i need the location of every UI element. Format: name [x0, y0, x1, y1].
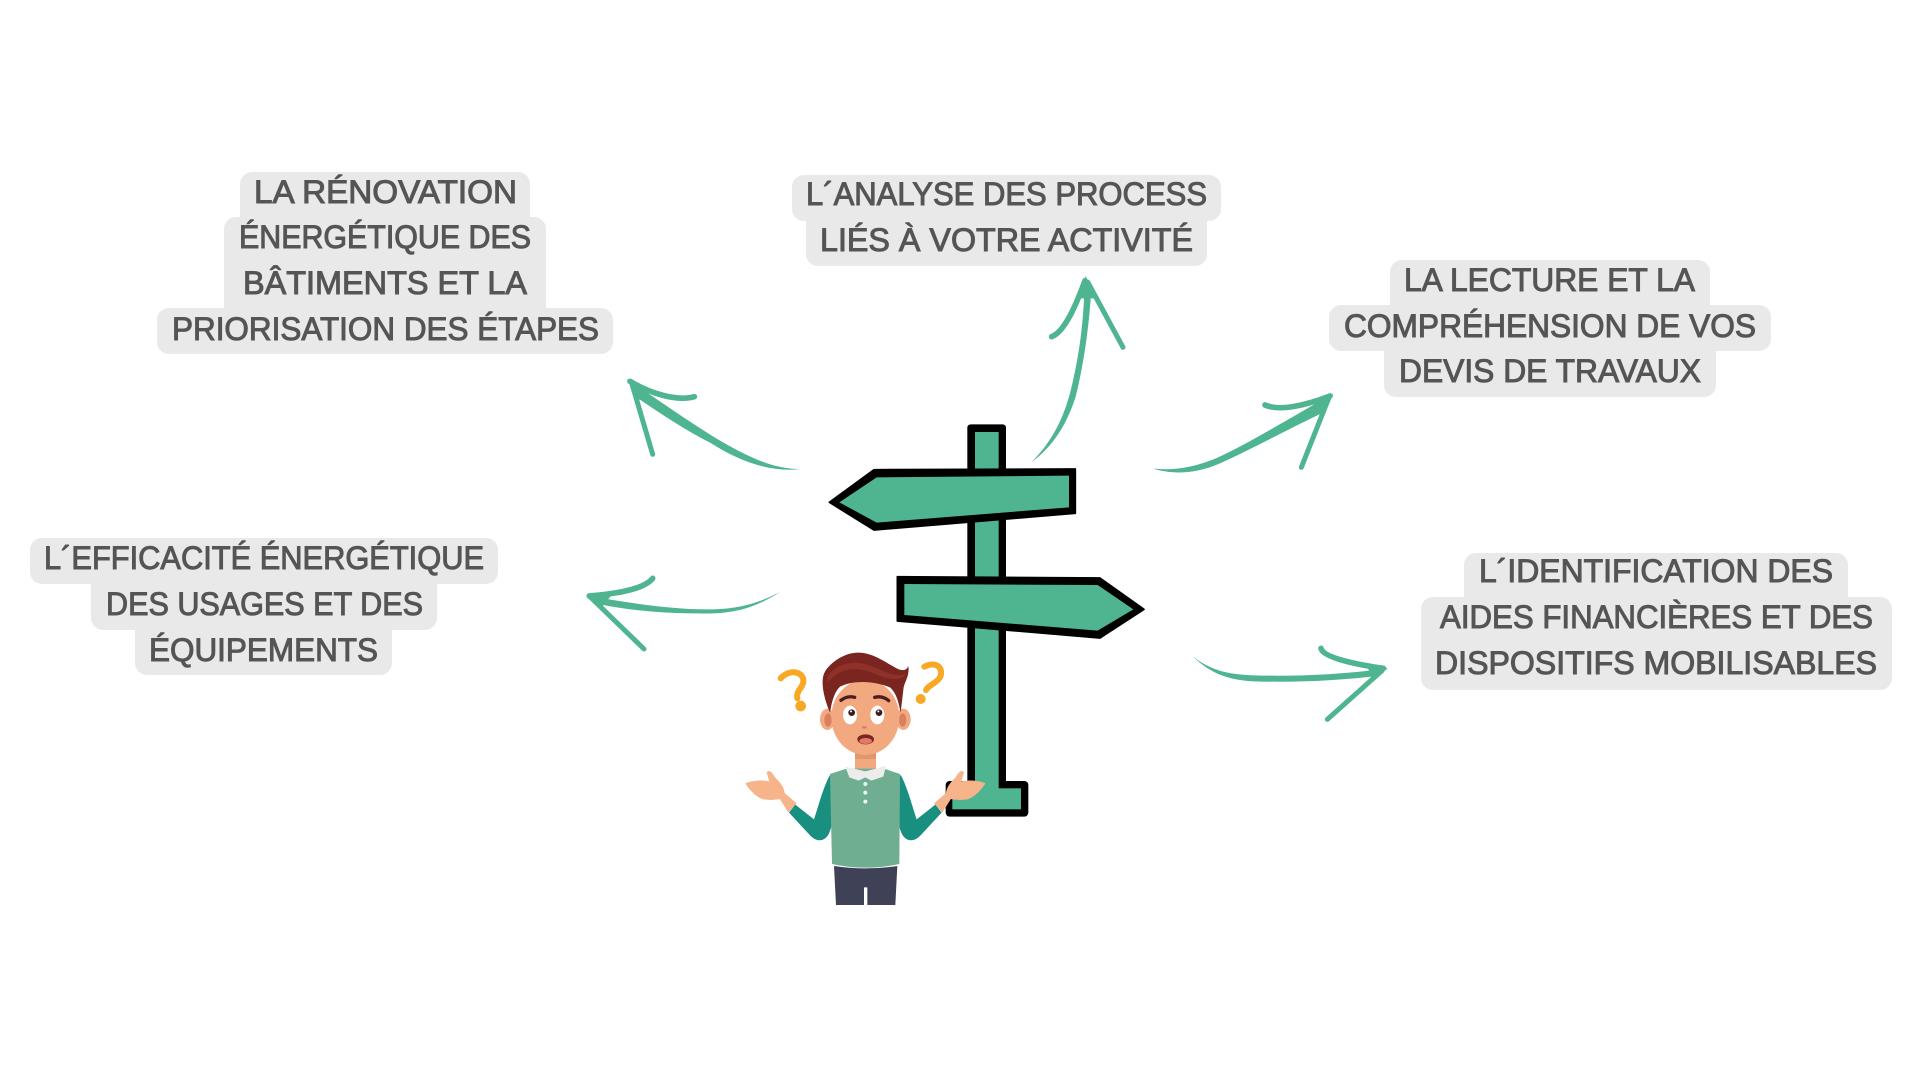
- label: rénovation énergétique: ÉNERGÉTIQUE DES: [239, 219, 531, 255]
- icon: signpost: [829, 424, 1144, 817]
- label: efficacité énergétique: [30, 538, 498, 675]
- label: efficacité énergétique: L´EFFICACITÉ ÉNERGÉTIQUE: [44, 540, 484, 576]
- upper sign pointing left: [829, 469, 1075, 530]
- arrow: to aides: [1193, 648, 1388, 719]
- left arm: [745, 771, 835, 840]
- label: lecture des devis: [1329, 260, 1771, 397]
- hair: [823, 653, 909, 713]
- label: rénovation énergétique: [157, 172, 613, 354]
- eyes: [843, 706, 884, 724]
- label: analyse des process: [792, 175, 1221, 266]
- arrow: to analyse: [1031, 276, 1123, 463]
- question mark right: [916, 665, 941, 704]
- buttons: [863, 782, 867, 804]
- label: lecture des devis: COMPRÉHENSION DE VOS: [1344, 308, 1756, 344]
- label: efficacité énergétique: DES USAGES ET DES: [106, 586, 423, 622]
- label: rénovation énergétique: BÂTIMENTS ET LA: [243, 265, 528, 301]
- illustration: puzzled man: [745, 653, 985, 905]
- label: analyse des process: L´ANALYSE DES PROCESS: [806, 176, 1207, 212]
- label: rénovation énergétique: PRIORISATION DES ÉTAPES: [172, 311, 599, 347]
- label: lecture des devis: LA LECTURE ET LA: [1404, 262, 1696, 298]
- label: aides financières: DISPOSITIFS MOBILISABLES: [1435, 645, 1877, 681]
- arrow: to lecture: [1153, 394, 1333, 472]
- face: [831, 680, 899, 755]
- lower sign pointing right: [897, 577, 1144, 638]
- post: [946, 424, 1028, 817]
- label: efficacité énergétique: ÉQUIPEMENTS: [149, 632, 378, 668]
- trousers: [834, 866, 897, 905]
- label: lecture des devis: DEVIS DE TRAVAUX: [1399, 353, 1701, 389]
- neck: [855, 752, 876, 772]
- vest: [830, 769, 900, 868]
- question mark left: [781, 672, 806, 711]
- nose: [862, 726, 867, 729]
- label: analyse des process: LIÉS À VOTRE ACTIVITÉ: [820, 222, 1193, 258]
- arrow: to efficacité: [586, 578, 781, 649]
- mouth: [857, 734, 874, 744]
- label: aides financières: L´IDENTIFICATION DES: [1479, 553, 1833, 589]
- ears: [820, 709, 911, 730]
- label: aides financières: AIDES FINANCIÈRES ET DES: [1440, 599, 1873, 635]
- eyebrows: [841, 697, 889, 701]
- label: aides financières: [1421, 553, 1892, 690]
- collar: [845, 766, 886, 781]
- right arm: [896, 771, 985, 840]
- label: rénovation énergétique: LA RÉNOVATION: [254, 174, 517, 210]
- arrow: to rénovation: [627, 379, 801, 470]
